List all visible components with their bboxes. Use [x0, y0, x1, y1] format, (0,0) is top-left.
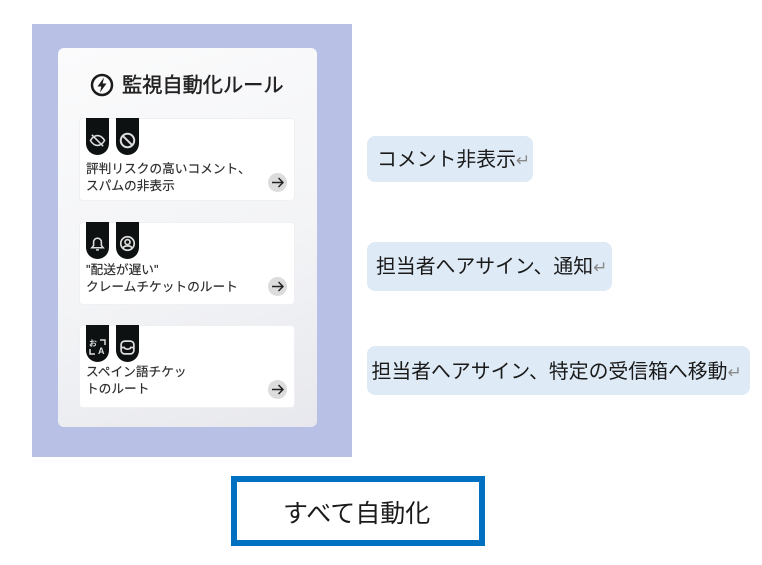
icon: arrow button [268, 380, 287, 399]
rule text: クレームチケットのルート [86, 280, 238, 294]
callout: fully automated [231, 476, 485, 546]
rule text [86, 263, 238, 294]
icon: translate: A [98, 346, 105, 356]
label text: ↵ [728, 363, 742, 382]
icon: account [116, 222, 139, 259]
label text: コメント非表示 [377, 149, 516, 171]
label text: ↵ [593, 258, 607, 277]
heading text: 監視自動化ルール [122, 75, 284, 97]
label: hide comments [367, 136, 533, 182]
rule text: トのルート [86, 382, 149, 396]
rule text [86, 162, 251, 193]
panel: monitoring automation rules card [58, 48, 317, 427]
icon: block [116, 118, 139, 155]
rule text: スパムの非表示 [86, 179, 175, 193]
icon: arrow button [268, 173, 287, 192]
rule text: 評判リスクの高いコメント、 [86, 162, 251, 176]
rule card: Spanish tickets [79, 325, 295, 408]
label: assign and move to inbox [367, 346, 750, 395]
rule text: "配送が遅い" [86, 263, 158, 277]
rule text [86, 365, 187, 396]
icon: translate: お [89, 339, 97, 348]
rule card: reputation risk [79, 118, 295, 201]
icon: hide [86, 118, 109, 155]
callout text: すべて自動化 [283, 500, 430, 528]
rule text: スペイン語チケッ [86, 365, 187, 379]
icon: bell [86, 222, 109, 259]
label text: 担当者へアサイン、特定の受信箱へ移動 [372, 361, 728, 383]
label text: ↵ [516, 151, 530, 170]
heading: monitoring automation rules [90, 74, 284, 97]
label: assign and notify [367, 242, 612, 291]
icon: arrow button [268, 277, 287, 296]
icon: inbox [116, 325, 139, 362]
panel: purple backdrop [32, 24, 352, 457]
label text: 担当者へアサイン、通知 [376, 256, 593, 278]
icon: translate [86, 325, 109, 362]
icon: lightning bolt [90, 74, 114, 96]
rule card: late delivery [79, 222, 295, 305]
